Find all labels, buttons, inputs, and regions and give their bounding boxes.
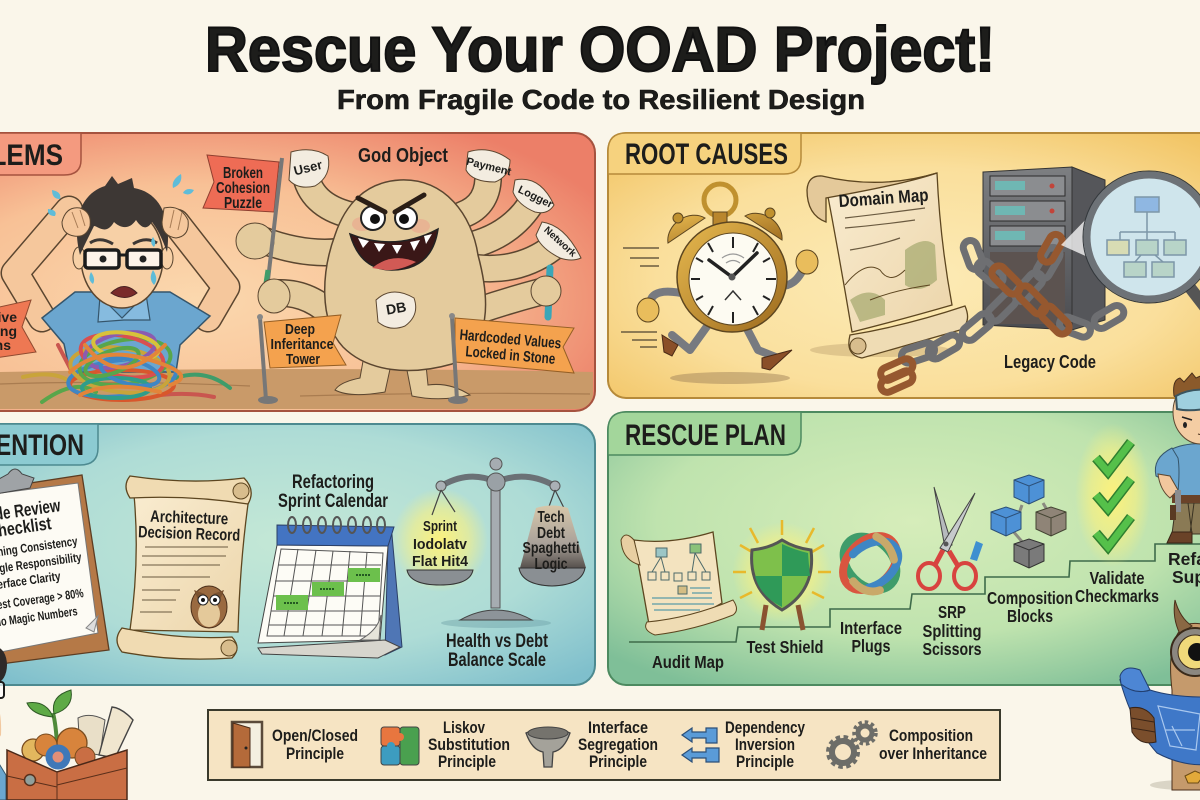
illustration: domain map scroll [807,173,968,358]
step: interface plugs: Plugs [852,636,891,656]
label: refactoring sprint calendar: Sprint Calendar [278,491,388,512]
hand: db: DB [385,298,407,318]
illustration: rusty chains [879,232,1126,394]
label: refactoring sprint calendar [278,472,388,512]
text: open closed principle: Open/Closed [272,726,358,745]
text: interface segregation principle: Segregation [578,735,658,754]
step: audit map [621,532,736,672]
step: srp splitting scissors [918,487,983,659]
scale left pan: sprint: Sprint [423,518,457,535]
step: srp splitting scissors: Scissors [922,639,982,659]
label: legacy code: Legacy Code [1004,352,1096,372]
subtitle: From Fragile Code to Resilient Design [337,84,865,115]
icon: puzzle [381,727,419,765]
flag: deep inheritance tower [257,314,346,404]
text: liskov substitution principle: Substitution [428,735,510,754]
step: audit map: Audit Map [652,652,724,672]
hand: db [376,292,416,328]
flag: deep inheritance tower: Deep [285,321,315,338]
label: refactoring sprint calendar: Refactoring [292,472,374,493]
text: composition over inheritance: over Inheritance [879,744,987,763]
monster mouth [350,229,438,270]
scale right pan: tech debt: Tech [538,509,564,526]
heading: rescue plan [608,412,801,455]
panel: root causes [608,133,1200,398]
flag: broken cohesion puzzle [203,155,282,280]
illustration: architecture decision record scroll [117,476,251,659]
label: health vs debt balance scale: Balance Scale [448,650,546,671]
step: validate checkmarks: Checkmarks [1075,586,1159,606]
illustration: stressed developer [15,174,226,372]
text: interface segregation principle: Interface [588,718,648,737]
step: interface plugs: Interface [840,618,902,638]
step: srp splitting scissors: Splitting [922,621,982,641]
scale right pan: tech debt: Debt [537,525,565,542]
text: interface segregation principle [578,718,658,771]
illustration: magnifying glass with class diagram [1061,171,1200,320]
flag: hardcoded values [448,313,574,404]
illustration: god object monster [203,145,581,399]
scale left pan: sprint: Iodolatv [413,536,468,553]
illustration: running clock [621,184,818,384]
legend: solid principles [208,710,1000,780]
character: owl with blueprint [1120,600,1200,790]
flag: broken cohesion puzzle: Cohesion [216,180,270,197]
character: developer at bottom left [0,647,7,800]
heading: root causes [608,133,801,174]
card: payment: Payment [465,156,513,179]
monster eyes [361,206,385,230]
text: composition over inheritance [879,726,987,763]
monster body [325,180,486,371]
illustration: balance scale [392,458,586,628]
heading: root causes: ROOT CAUSES [625,138,788,171]
monster arms [262,172,552,318]
flag: hardcoded values: Locked in Stone [465,343,556,368]
icon: dependency inversion arrows [682,728,719,762]
scale left pan: sprint: Flat Hit4 [412,553,469,570]
flag: deep inheritance tower: Tower [286,351,320,368]
flag: broken cohesion puzzle: Puzzle [224,195,262,212]
step: test shield [732,520,832,657]
flag: hardcoded values: Hardcoded Values [459,327,562,352]
step: composition blocks [987,475,1073,626]
text: composition over inheritance: Composition [889,726,973,745]
text: liskov substitution principle: Liskov [443,718,485,737]
text: open closed principle: Principle [286,744,344,763]
step: srp splitting scissors: SRP [938,602,966,622]
icon: open door [232,722,262,767]
text: liskov substitution principle: Principle [438,752,496,771]
text: dependency inversion principle: Dependency [725,718,805,737]
flag: broken cohesion puzzle: Broken [223,165,263,182]
panel: prevention [0,424,595,685]
illustration: code review checklist [0,469,109,668]
rising staircase line [629,544,1200,642]
card: user [289,150,329,187]
card: network: Network [541,225,578,260]
illustration: architecture decision record scroll: Decision Record [138,523,240,545]
text: interface segregation principle: Principle [589,752,647,771]
heading: rescue plan: RESCUE PLAN [625,419,786,452]
scale right pan: tech debt: Logic [534,556,568,573]
icon: gears [828,722,876,767]
text: open closed principle [272,726,358,763]
panel: problems [0,133,595,411]
illustration: legacy server [983,167,1105,330]
label: health vs debt balance scale: Health vs Debt [446,631,549,652]
card: logger: Logger [516,184,555,211]
title: Rescue Your OOAD Project! [205,15,995,85]
step: validate checkmarks: Validate [1090,568,1145,588]
illustration: sprint calendar [258,517,402,658]
step: interface plugs [833,526,907,656]
label: god object: God Object [358,145,448,167]
panel: rescue plan [608,412,1200,685]
scale right pan: tech debt: Spaghetti [522,540,580,557]
heading: prevention [0,424,98,465]
text: liskov substitution principle [428,718,510,771]
text: dependency inversion principle: Inversion [735,735,795,754]
flag: deep inheritance tower: Inferitance [270,336,334,353]
illustration: architecture decision record scroll: Architecture [150,508,228,528]
owl stamp [191,586,227,628]
step: refactor superhero label [1168,549,1200,587]
map label: Domain Map [838,185,929,211]
step: composition blocks: Blocks [1007,606,1053,626]
step: test shield: Test Shield [746,637,824,657]
text: dependency inversion principle [725,718,805,771]
card: user: User [292,157,324,178]
label: health vs debt balance scale [446,631,549,671]
monster legs [335,350,470,399]
character: engineer with goggles [1155,373,1200,543]
hand with screwdriver [258,270,290,313]
icon: funnel [526,727,570,767]
illustration: tangled spaghetti wires [23,326,230,402]
step: composition blocks: Composition [987,588,1073,608]
text: dependency inversion principle: Principle [736,752,794,771]
scale left pan: sprint [392,488,565,592]
step: validate checkmarks [1075,423,1159,606]
fist: raised [236,223,274,259]
scale right pan: tech debt [519,506,586,586]
hand with blue tool [531,268,561,317]
flag: massive nesting [0,300,36,358]
illustration: toolbox with seedling and gears [7,690,133,800]
